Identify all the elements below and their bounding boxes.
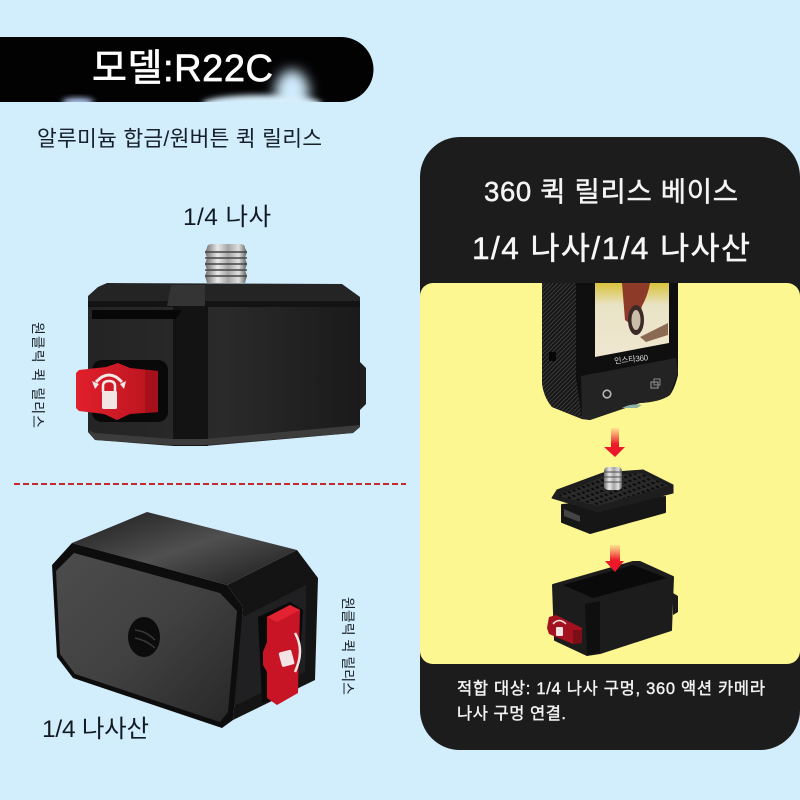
panel subheading: 1/4 나사/1/4 나사산 bbox=[472, 230, 750, 266]
base lever bbox=[547, 615, 582, 644]
lever recess bbox=[92, 360, 168, 422]
right side bbox=[227, 550, 318, 720]
base unit bbox=[547, 562, 678, 655]
front face bbox=[52, 543, 243, 728]
panel heading: 360 퀵 릴리스 베이스 bbox=[484, 176, 738, 207]
model title: 모델:R22C bbox=[92, 48, 273, 90]
label: 1/4 socket: 1/4 나사산 bbox=[42, 715, 149, 743]
panel: 360 quick release base bbox=[420, 137, 800, 750]
camera bbox=[542, 283, 678, 420]
note line 2: 나사 구멍 연결. bbox=[457, 704, 566, 723]
threaded hole bbox=[128, 617, 160, 657]
dashed divider bbox=[14, 483, 406, 485]
camera screen bbox=[595, 283, 669, 357]
side label: one-click release bottom: 원클릭 퀵 릴리스 bbox=[340, 597, 356, 695]
yellow image area bbox=[420, 283, 800, 664]
note line 1: 적합 대상: 1/4 나사 구멍, 360 액션 카메라 bbox=[457, 679, 765, 698]
top plate bbox=[88, 283, 360, 307]
lever recess bbox=[258, 602, 303, 703]
product: quick release with screw bbox=[76, 244, 366, 446]
camera brand: 인스타360 bbox=[614, 352, 649, 366]
arrow down 1 bbox=[604, 428, 625, 457]
main body bbox=[88, 307, 360, 446]
unlock icon bbox=[278, 633, 300, 672]
label: 1/4 screw: 1/4 나사 bbox=[183, 203, 271, 231]
red lever bbox=[76, 363, 158, 420]
side label: one-click release top: 원클릭 퀵 릴리스 bbox=[30, 322, 46, 428]
red lever bbox=[263, 605, 300, 705]
model pill header bbox=[0, 37, 374, 102]
unlock icon bbox=[92, 375, 126, 409]
arrow down 2 bbox=[605, 545, 624, 572]
screw bbox=[205, 244, 247, 283]
side knob stub bbox=[360, 362, 366, 410]
mounting plate bbox=[552, 467, 673, 533]
subtitle: 알루미늄 합금/원버튼 퀵 릴리스 bbox=[37, 127, 322, 151]
product: quick release with socket bbox=[52, 512, 318, 728]
compatibility note bbox=[457, 679, 765, 723]
camera buttons bbox=[581, 358, 678, 420]
top face bbox=[72, 512, 297, 585]
plate screw bbox=[604, 467, 622, 490]
